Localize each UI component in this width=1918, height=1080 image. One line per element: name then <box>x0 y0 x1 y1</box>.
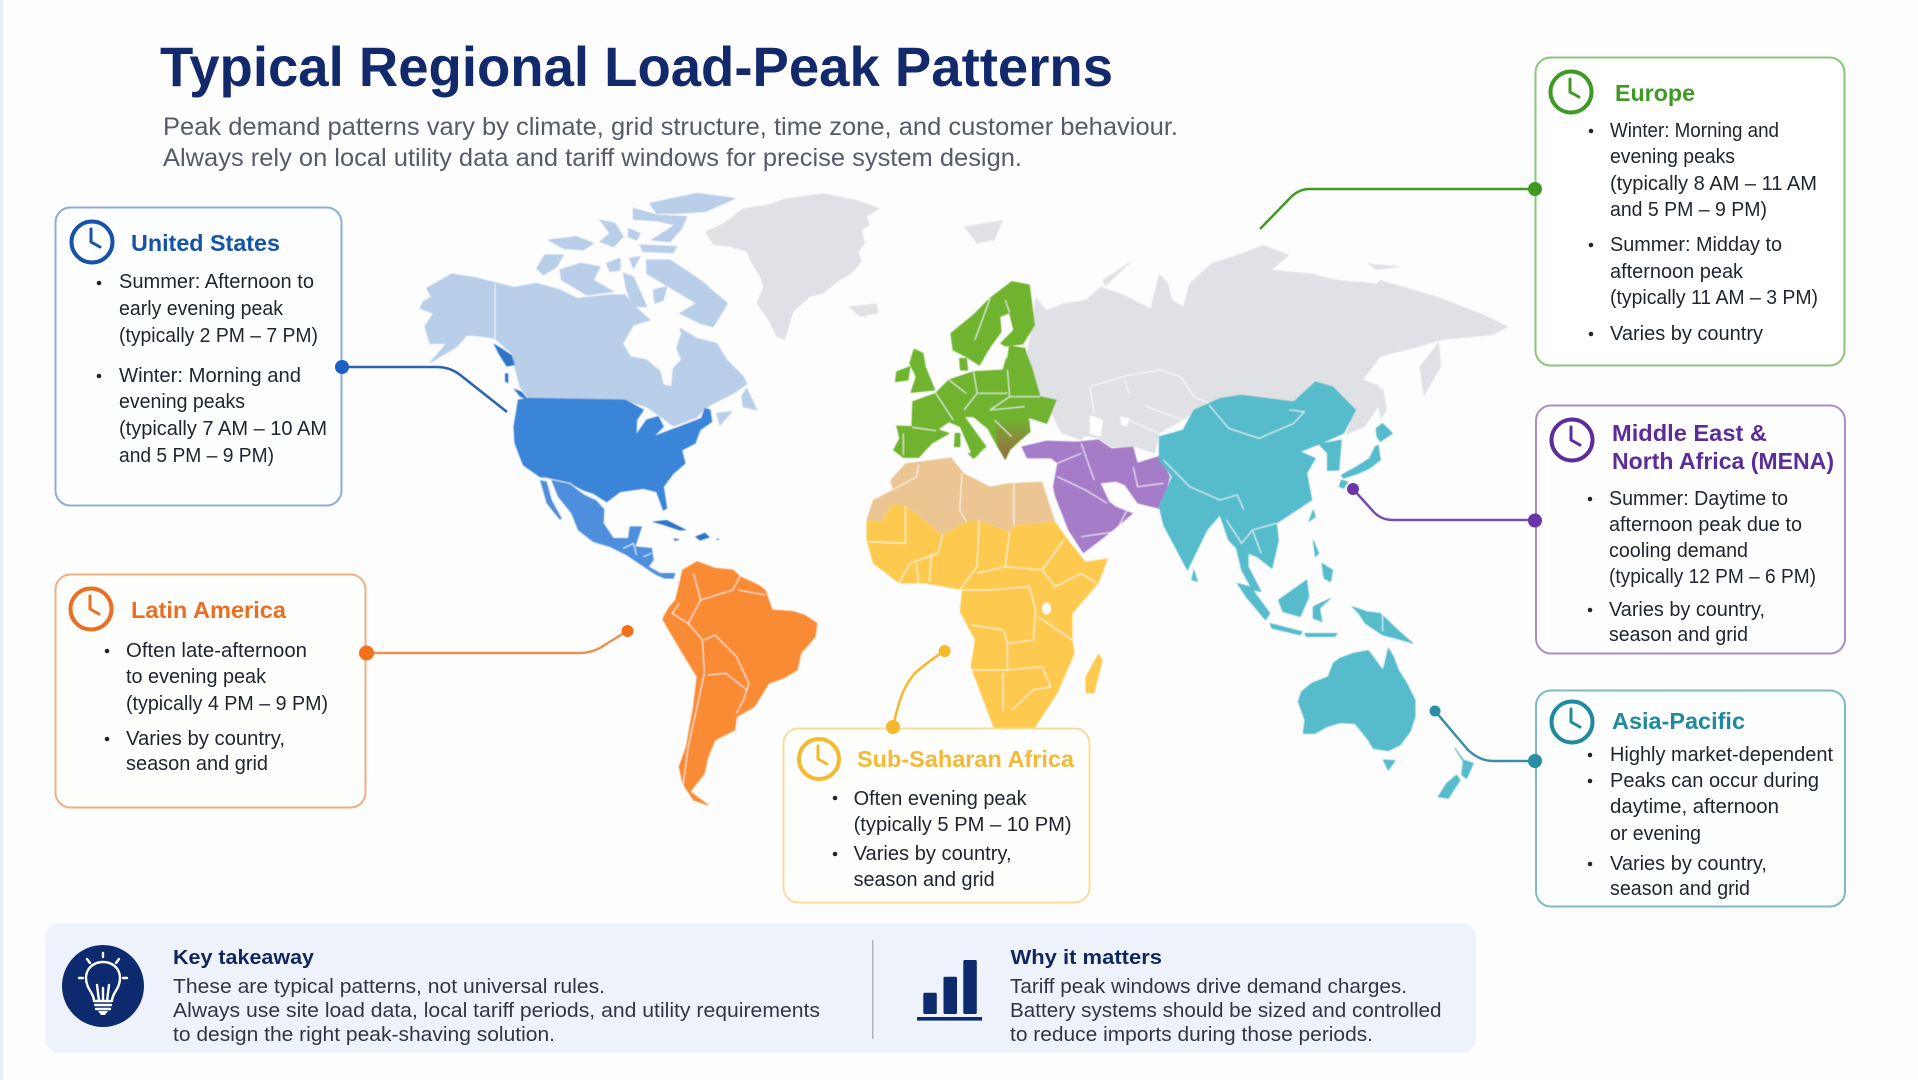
heading <box>1612 420 1834 474</box>
region: South America <box>663 562 817 805</box>
text: key takeaway: to design the right peak-shaving solution. <box>173 1024 555 1046</box>
heading: United States <box>131 230 280 256</box>
text: bullets: evening peaks <box>119 391 245 413</box>
region: Russia and Central Asia <box>860 220 1508 453</box>
text: bullets: season and grid <box>1610 878 1750 900</box>
region: Sub-Saharan Africa <box>867 503 1108 730</box>
text: bullets: Varies by country, <box>854 843 1012 865</box>
text: bullets: Highly market-dependent <box>1610 744 1833 766</box>
panel: Latin America <box>56 574 374 808</box>
text: bullets: Varies by country, <box>1610 853 1767 875</box>
icon: clock <box>72 222 112 262</box>
text: bullets <box>97 271 327 467</box>
text: bullets: (typically 11 AM – 3 PM) <box>1610 287 1818 309</box>
connector dot <box>1528 182 1542 196</box>
region: Europe <box>894 282 1056 459</box>
region: Mexico, Central America and Caribbean <box>540 478 720 578</box>
text: why it matters <box>1010 947 1442 1046</box>
panel: Europe <box>1528 58 1844 366</box>
connector: Sub-Saharan Africa <box>893 645 951 727</box>
text: bullets: Often evening peak <box>854 788 1028 810</box>
text: bullets: (typically 2 PM – 7 PM) <box>119 325 318 347</box>
text: bullets: Summer: Daytime to <box>1609 488 1788 510</box>
heading: Europe <box>1615 80 1695 106</box>
region: Australia and New Zealand <box>1298 648 1473 798</box>
heading: Sub-Saharan Africa <box>857 746 1074 772</box>
connector dot <box>886 720 900 734</box>
text: bullets: evening peaks <box>1610 146 1735 168</box>
region: Asia <box>1159 382 1413 643</box>
region: North Africa <box>867 457 1055 535</box>
text: bullets: (typically 5 PM – 10 PM) <box>854 814 1072 836</box>
text: bullets <box>1589 120 1818 345</box>
text: bullets: (typically 8 AM – 11 AM <box>1610 173 1817 195</box>
text: bullets: daytime, afternoon <box>1610 796 1779 818</box>
panel: Sub-Saharan Africa <box>784 720 1090 902</box>
text: bullets: afternoon peak <box>1610 261 1744 283</box>
text: bullets <box>1588 488 1816 646</box>
text: key takeaway <box>173 947 820 1046</box>
text: bullets: season and grid <box>1609 624 1748 646</box>
heading: Latin America <box>131 597 286 623</box>
panel: bottom takeaways <box>45 923 1476 1053</box>
text: why it matters: Why it matters <box>1010 947 1162 969</box>
icon: clock <box>70 588 112 630</box>
text: bullets: afternoon peak due to <box>1609 514 1802 536</box>
text: bullets: Varies by country, <box>1609 599 1765 621</box>
region: Greenland and Iceland <box>705 193 880 340</box>
text: bullets: early evening peak <box>119 298 284 320</box>
text: bullets: Winter: Morning and <box>1610 120 1779 142</box>
text: bullets <box>105 640 328 775</box>
text: bullets: Peaks can occur during <box>1610 770 1819 792</box>
text: bullets: (typically 7 AM – 10 AM <box>119 418 327 440</box>
panel: Middle East and North Africa <box>1528 406 1845 654</box>
text: key takeaway: These are typical patterns, not universal rules. <box>173 976 605 998</box>
text: bullets: and 5 PM – 9 PM) <box>119 445 274 467</box>
connector: United States <box>342 367 507 412</box>
region: Canada and Alaska <box>420 193 757 426</box>
connector: Middle East and North Africa <box>1347 483 1535 520</box>
subtitle: Peak demand patterns vary by climate, grid structure, time zone, and customer behaviour. <box>163 113 1178 141</box>
world map <box>420 193 1508 805</box>
text: why it matters: Battery systems should be sized and controlled <box>1010 1000 1442 1022</box>
panel: United States <box>56 208 349 506</box>
text: bullets: (typically 12 PM – 6 PM) <box>1609 566 1816 588</box>
connector: Latin America <box>366 625 634 653</box>
text: key takeaway: Always use site load data, local tariff periods, and utility requirements <box>173 1000 820 1022</box>
text: bullets: to evening peak <box>126 666 267 688</box>
text: bullets: Summer: Afternoon to <box>119 271 314 293</box>
text: bullets <box>1588 744 1833 900</box>
icon: clock <box>1550 72 1592 112</box>
connector dot <box>1528 514 1542 528</box>
text: why it matters: Tariff peak windows drive demand charges. <box>1010 976 1407 998</box>
text: bullets: or evening <box>1610 823 1701 845</box>
text: bullets <box>833 788 1072 891</box>
subtitle: Always rely on local utility data and tariff windows for precise system design. <box>163 144 1022 172</box>
panel: Asia-Pacific <box>1528 690 1845 906</box>
text: bullets: season and grid <box>854 869 995 891</box>
text: bullets: Often late-afternoon <box>126 640 307 662</box>
connector: Asia-Pacific <box>1430 706 1535 761</box>
icon: bar chart <box>917 960 982 1021</box>
heading: North Africa (MENA) <box>1612 448 1834 474</box>
text: bullets: and 5 PM – 9 PM) <box>1610 199 1767 221</box>
text: key takeaway: Key takeaway <box>173 947 315 969</box>
connector dot <box>335 360 349 374</box>
text: bullets: Varies by country <box>1610 323 1763 345</box>
heading: Middle East & <box>1612 420 1767 446</box>
title: Typical Regional Load-Peak Patterns <box>160 35 1113 98</box>
connector dot <box>359 646 374 660</box>
icon: clock <box>1552 420 1592 460</box>
text: bullets: (typically 4 PM – 9 PM) <box>126 693 328 715</box>
heading: Asia-Pacific <box>1612 708 1745 734</box>
text: bullets: Winter: Morning and <box>119 365 301 387</box>
text: bullets: Summer: Midday to <box>1610 234 1782 256</box>
text: why it matters: to reduce imports during those periods. <box>1010 1024 1373 1046</box>
text: bullets: cooling demand <box>1609 540 1748 562</box>
connector dot <box>1528 754 1542 768</box>
connector: Europe <box>1260 189 1535 229</box>
text: bullets: Varies by country, <box>126 728 285 750</box>
text: bullets: season and grid <box>126 753 268 775</box>
icon: clock <box>799 739 839 779</box>
subtitle <box>163 113 1178 172</box>
region: Middle East <box>1021 439 1170 553</box>
icon: clock <box>1552 702 1592 742</box>
region: United States <box>493 343 712 510</box>
icon: light bulb <box>62 945 144 1027</box>
